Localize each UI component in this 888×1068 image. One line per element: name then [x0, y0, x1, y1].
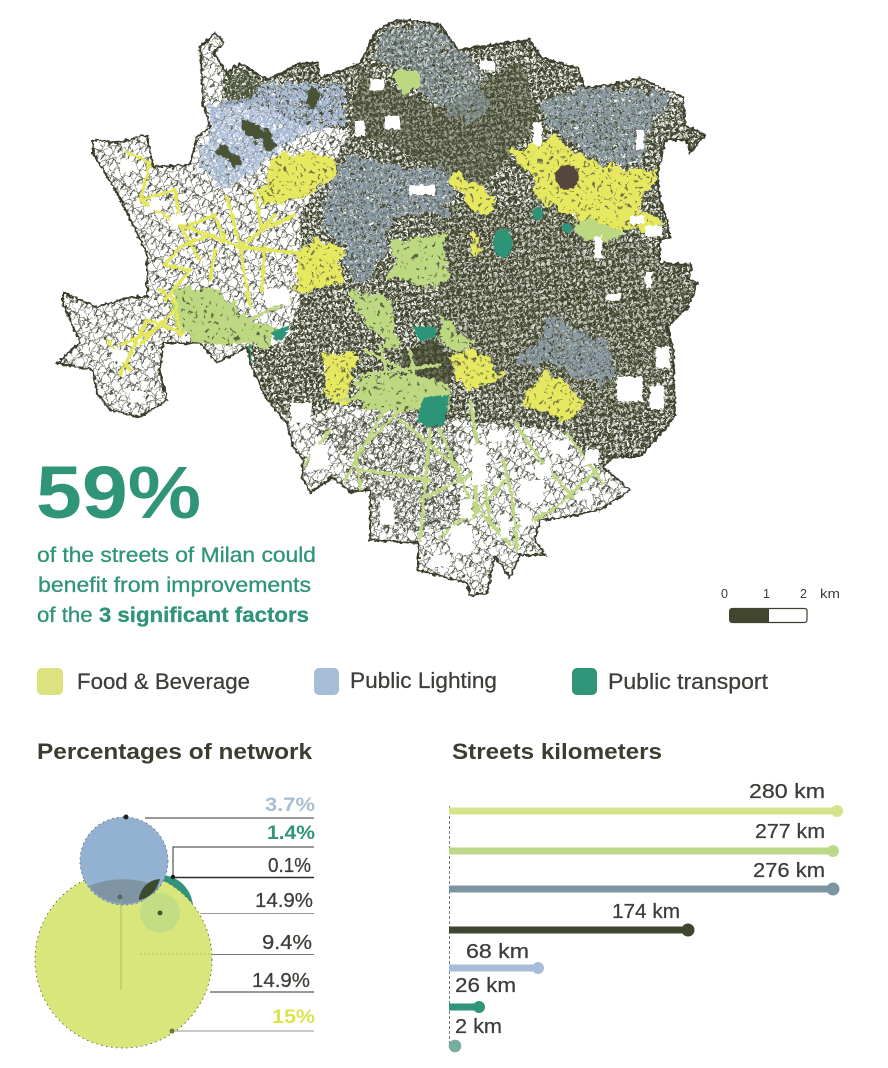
lighting zones — [197, 25, 673, 388]
teal public transport areas — [246, 207, 572, 428]
dark roundabout hole — [555, 165, 579, 189]
medium density south west mesh — [310, 410, 460, 530]
empty white blocks — [112, 60, 670, 567]
bar: 26 km: 26 km — [455, 975, 516, 997]
circle: public transport — [127, 875, 193, 941]
dark park islands — [215, 89, 319, 166]
green street network south — [183, 300, 603, 550]
heading: streets kilometers: Streets kilometers — [452, 739, 662, 764]
percentage labels: 14.9% — [252, 970, 310, 992]
bar: 276 km: 276 km — [753, 860, 825, 882]
bar: 2 km — [449, 1016, 502, 1052]
scale bar: 0 — [721, 587, 728, 601]
bar: 276 km — [449, 860, 840, 896]
percentage labels: 3.7% — [265, 795, 315, 816]
description text — [37, 544, 316, 627]
grey blue lighting south east — [513, 313, 617, 388]
lollipop bar chart of street kilometers — [449, 781, 843, 1052]
center dots and guide lines — [118, 814, 212, 1034]
legend — [37, 668, 768, 695]
grey blue lighting north — [370, 25, 490, 125]
yellow street network west — [107, 152, 297, 375]
circle: light green overlap — [140, 893, 180, 933]
yellow food and beverage clusters — [257, 137, 667, 423]
percentage labels: 1.4% — [267, 823, 315, 844]
bar: 26 km — [449, 975, 516, 1013]
dense street network — [222, 15, 720, 470]
bar: 174 km: 174 km — [612, 901, 680, 923]
city boundary — [57, 20, 705, 595]
venn chart of network percentages — [35, 795, 315, 1048]
solid dark core north — [350, 60, 540, 190]
percentage labels — [252, 795, 315, 1028]
bar: 2 km: 2 km — [455, 1016, 502, 1038]
bar: 277 km — [449, 821, 839, 857]
scale bar: 2 — [800, 587, 807, 601]
bar: 68 km — [449, 941, 544, 974]
overlap: lighting and food — [89, 879, 159, 904]
light green zones — [173, 67, 627, 412]
bar: 280 km: 280 km — [749, 781, 825, 803]
legend item: food and beverage: Food & Beverage — [77, 669, 250, 694]
percentage labels: 14.9% — [255, 890, 313, 912]
sparse street base — [40, 10, 720, 610]
headline statistic: 59% — [36, 451, 201, 534]
bar: 68 km: 68 km — [466, 941, 529, 963]
legend item: public transport: Public transport — [608, 669, 768, 694]
circle: food and beverage — [35, 871, 212, 1048]
percentage labels: 15% — [272, 1007, 315, 1028]
percentage labels: 9.4% — [262, 932, 312, 954]
grey blue lighting north east — [543, 87, 673, 163]
solid dark core — [425, 205, 690, 420]
bar: 174 km — [449, 901, 694, 936]
dark block south of centre — [402, 340, 453, 388]
light blue lighting area — [197, 82, 347, 190]
overlap: lighting and transport — [139, 879, 160, 900]
scale bar: 1 — [763, 587, 770, 601]
circle: public lighting — [80, 817, 168, 905]
heading: percentages of network: Percentages of network — [37, 739, 313, 764]
scale bar — [721, 587, 840, 623]
grey blue lighting centre — [320, 153, 450, 283]
scale bar: km — [820, 587, 840, 601]
dark park north west — [228, 68, 262, 100]
bar: 277 km: 277 km — [755, 821, 825, 843]
description text: of the 3 significant factors — [37, 604, 309, 627]
description text: of the streets of Milan could — [37, 544, 316, 567]
leader lines — [145, 818, 314, 1031]
percentage labels: 0.1% — [268, 855, 311, 877]
description text: benefit from improvements — [38, 574, 311, 597]
bar: 280 km — [449, 781, 843, 817]
legend item: public lighting: Public Lighting — [350, 668, 497, 693]
map of Milan street network — [40, 10, 720, 610]
